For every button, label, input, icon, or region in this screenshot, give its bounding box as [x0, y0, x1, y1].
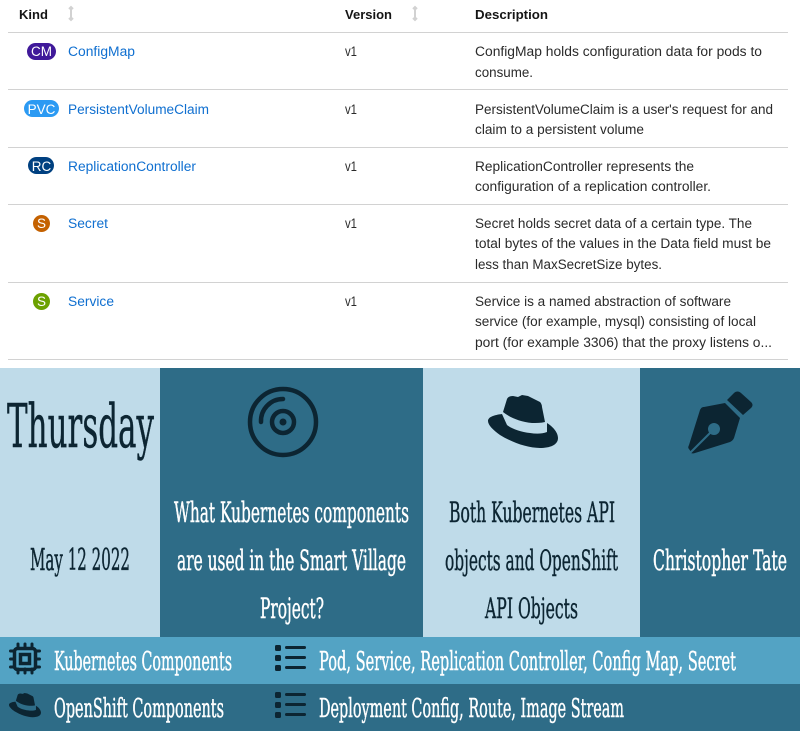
question text: are used in the Smart Village — [177, 544, 406, 577]
row: ConfigMap: ConfigMap — [68, 44, 135, 59]
row: Secret — [33, 215, 771, 272]
row: ConfigMap: CM — [31, 44, 52, 59]
table header: Kind — [19, 8, 48, 22]
answer text: objects and OpenShift — [445, 544, 618, 577]
row: Secret: total bytes of the values in the Data field must be — [475, 236, 771, 251]
label: OpenShift Components — [54, 694, 224, 724]
row: Secret: v1 — [345, 216, 357, 231]
row: Kubernetes components — [0, 637, 800, 684]
table: API resources — [0, 0, 800, 368]
panel: question — [160, 368, 423, 637]
row: ReplicationController: ReplicationController represents the — [475, 159, 694, 174]
panel: date — [0, 368, 160, 637]
heading: Thursday: Thursday — [7, 392, 154, 462]
row: ConfigMap: consume. — [475, 65, 533, 80]
panel: answer — [423, 368, 640, 637]
row: Service: service (for example, mysql) consisting of local — [475, 314, 756, 329]
answer text: Both Kubernetes API — [449, 496, 615, 529]
row: Service — [33, 293, 772, 350]
icon: disc — [250, 389, 316, 455]
date text: May 12 2022 — [30, 543, 130, 578]
question text: Project? — [260, 592, 324, 625]
row: Service: v1 — [345, 294, 357, 309]
answer text — [445, 496, 618, 625]
row: ReplicationController — [28, 157, 711, 194]
table header: Description — [475, 8, 548, 22]
icon: fountain pen — [688, 392, 752, 453]
row: Secret: S — [37, 216, 46, 231]
question text — [174, 496, 409, 625]
row: OpenShift components — [0, 684, 800, 731]
icon: fedora hat small — [9, 693, 41, 717]
panel: author — [640, 368, 800, 637]
label: Kubernetes Components — [54, 647, 232, 677]
table header — [19, 7, 548, 22]
row: PersistentVolumeClaim: PersistentVolumeClaim — [68, 102, 209, 117]
icon: list — [275, 692, 306, 718]
row: Secret: less than MaxSecretSize bytes. — [475, 257, 662, 272]
row: PersistentVolumeClaim: PersistentVolumeClaim is a user's request for and — [475, 102, 773, 117]
row: ConfigMap: v1 — [345, 44, 357, 59]
row: Service: port (for example 3306) that the proxy listens o... — [475, 335, 772, 350]
table header: Version — [345, 8, 392, 22]
icon: fedora hat — [488, 395, 558, 448]
question text: What Kubernetes components — [174, 496, 409, 529]
row: Secret: Secret — [68, 216, 108, 231]
row: ConfigMap — [27, 43, 762, 80]
row: ReplicationController: ReplicationController — [68, 159, 197, 174]
row: Service: Service — [68, 294, 114, 309]
row: ReplicationController: configuration of a replication controller. — [475, 179, 711, 194]
row: PersistentVolumeClaim: claim to a persistent volume — [475, 122, 644, 137]
row: Service: S — [37, 294, 46, 309]
row: Service: Service is a named abstraction of software — [475, 294, 731, 309]
row: ConfigMap: ConfigMap holds configuration data for pods to — [475, 44, 762, 59]
icon: chip — [10, 644, 40, 673]
row: ReplicationController: v1 — [345, 159, 357, 174]
icon: list — [275, 645, 306, 671]
row: PersistentVolumeClaim: v1 — [345, 102, 357, 117]
answer text: API Objects — [484, 592, 578, 625]
row: Secret: Secret holds secret data of a certain type. The — [475, 216, 752, 231]
row: PersistentVolumeClaim: PVC — [28, 102, 56, 117]
row: ReplicationController: RC — [32, 159, 51, 174]
row: PersistentVolumeClaim — [24, 100, 773, 137]
